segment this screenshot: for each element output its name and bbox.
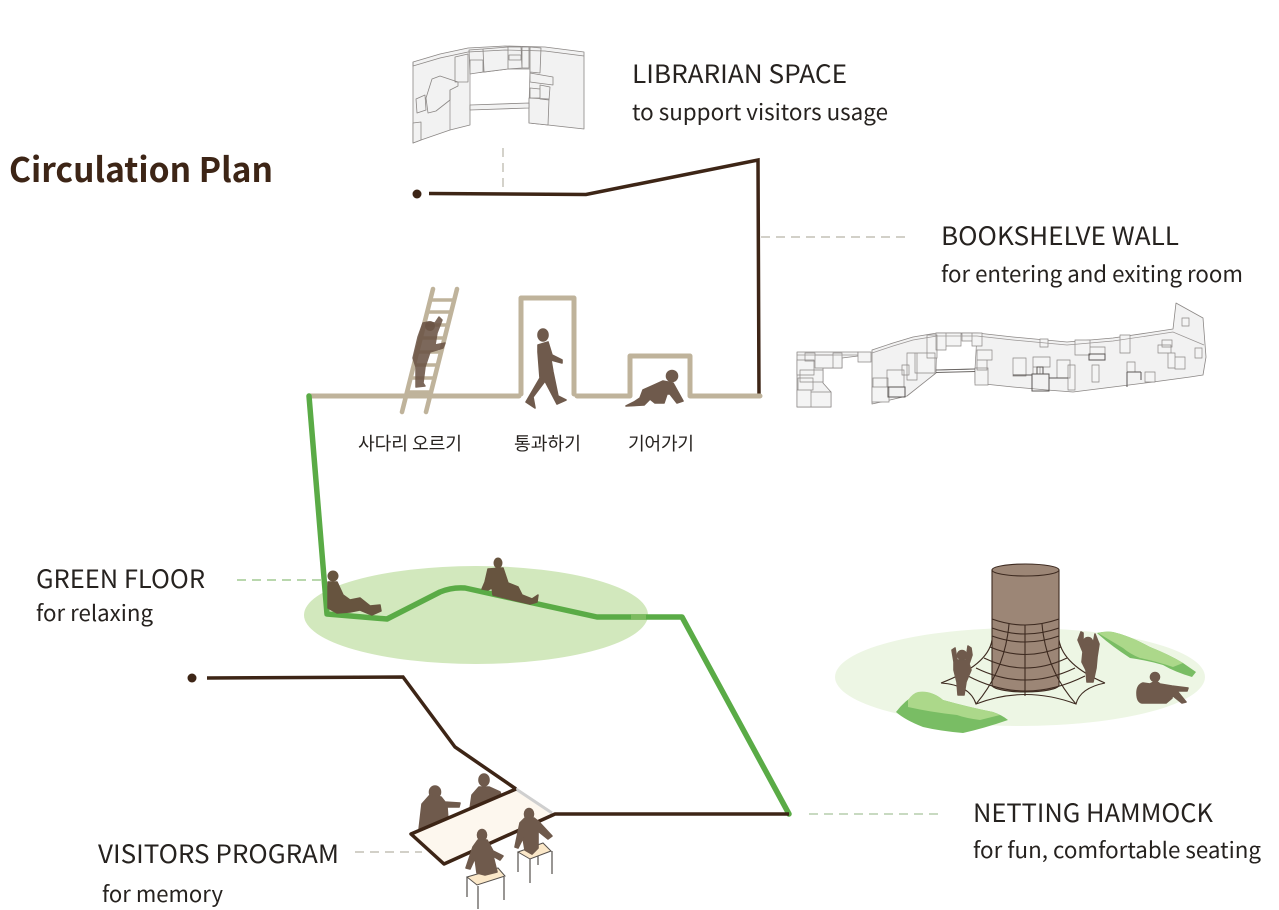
title: Circulation Plan — [9, 143, 273, 192]
mound: left green mound — [896, 692, 1008, 733]
path: green circulation — [309, 396, 789, 814]
figure: person on bean bag — [1137, 672, 1188, 703]
figure: crawling person — [626, 370, 683, 406]
connector: green floor dashed leader — [237, 579, 322, 581]
heading: green floor: GREEN FLOOR — [36, 559, 205, 596]
figure: walking person — [526, 329, 566, 408]
heading: visitors program: VISITORS PROGRAM — [98, 834, 339, 871]
text: green floor caption: for relaxing — [36, 596, 154, 628]
figure: left climber on net — [952, 646, 972, 695]
net: hammock net — [941, 619, 1105, 704]
cylinder: central column — [992, 564, 1059, 692]
stool: back stool — [518, 843, 552, 883]
figure: standing visitor right — [470, 774, 501, 809]
text: netting caption: for fun, comfortable seating — [973, 833, 1262, 865]
ellipse: green floor zone — [304, 566, 648, 664]
heading: netting hammock: NETTING HAMMOCK — [973, 793, 1214, 830]
path: tan activity line — [309, 298, 760, 396]
connector: visitors dashed leader — [355, 851, 422, 853]
figure: seated visitor front — [466, 830, 503, 875]
figure: standing visitor left — [419, 786, 460, 832]
text: visitors caption: for memory — [102, 877, 224, 909]
connector: netting dashed leader — [809, 813, 942, 815]
heading: bookshelve wall: BOOKSHELVE WALL — [941, 216, 1179, 253]
connector: librarian dashed leader — [502, 148, 504, 193]
illustration: netting hammock scene — [835, 564, 1205, 733]
label: crawling: 기어가기 — [628, 430, 694, 456]
mound: right green mound — [1097, 632, 1196, 677]
figure: person seated against wall — [328, 570, 381, 615]
label: passing through: 통과하기 — [514, 430, 581, 456]
illustration: ladder with climbing figure — [402, 289, 457, 412]
connector: bookshelf dashed leader — [761, 236, 905, 238]
figure: person seated on slope — [482, 558, 538, 604]
label: climbing ladder: 사다리 오르기 — [358, 430, 462, 456]
table: visitors program table — [411, 789, 789, 864]
path: dark circulation lower — [188, 674, 516, 789]
ellipse: hammock ground — [835, 628, 1205, 726]
figure: seated visitor back — [515, 808, 552, 854]
text: librarian caption: to support visitors usage — [632, 95, 888, 127]
heading: librarian space: LIBRARIAN SPACE — [632, 54, 847, 91]
path: dark circulation upper — [412, 160, 759, 395]
illustration: librarian space wall — [413, 46, 584, 143]
illustration: bookshelve wall — [797, 303, 1206, 407]
figure: right climber on net — [1078, 632, 1099, 682]
stool: front stool — [467, 868, 505, 909]
text: bookshelve caption: for entering and exiting room — [941, 257, 1243, 289]
